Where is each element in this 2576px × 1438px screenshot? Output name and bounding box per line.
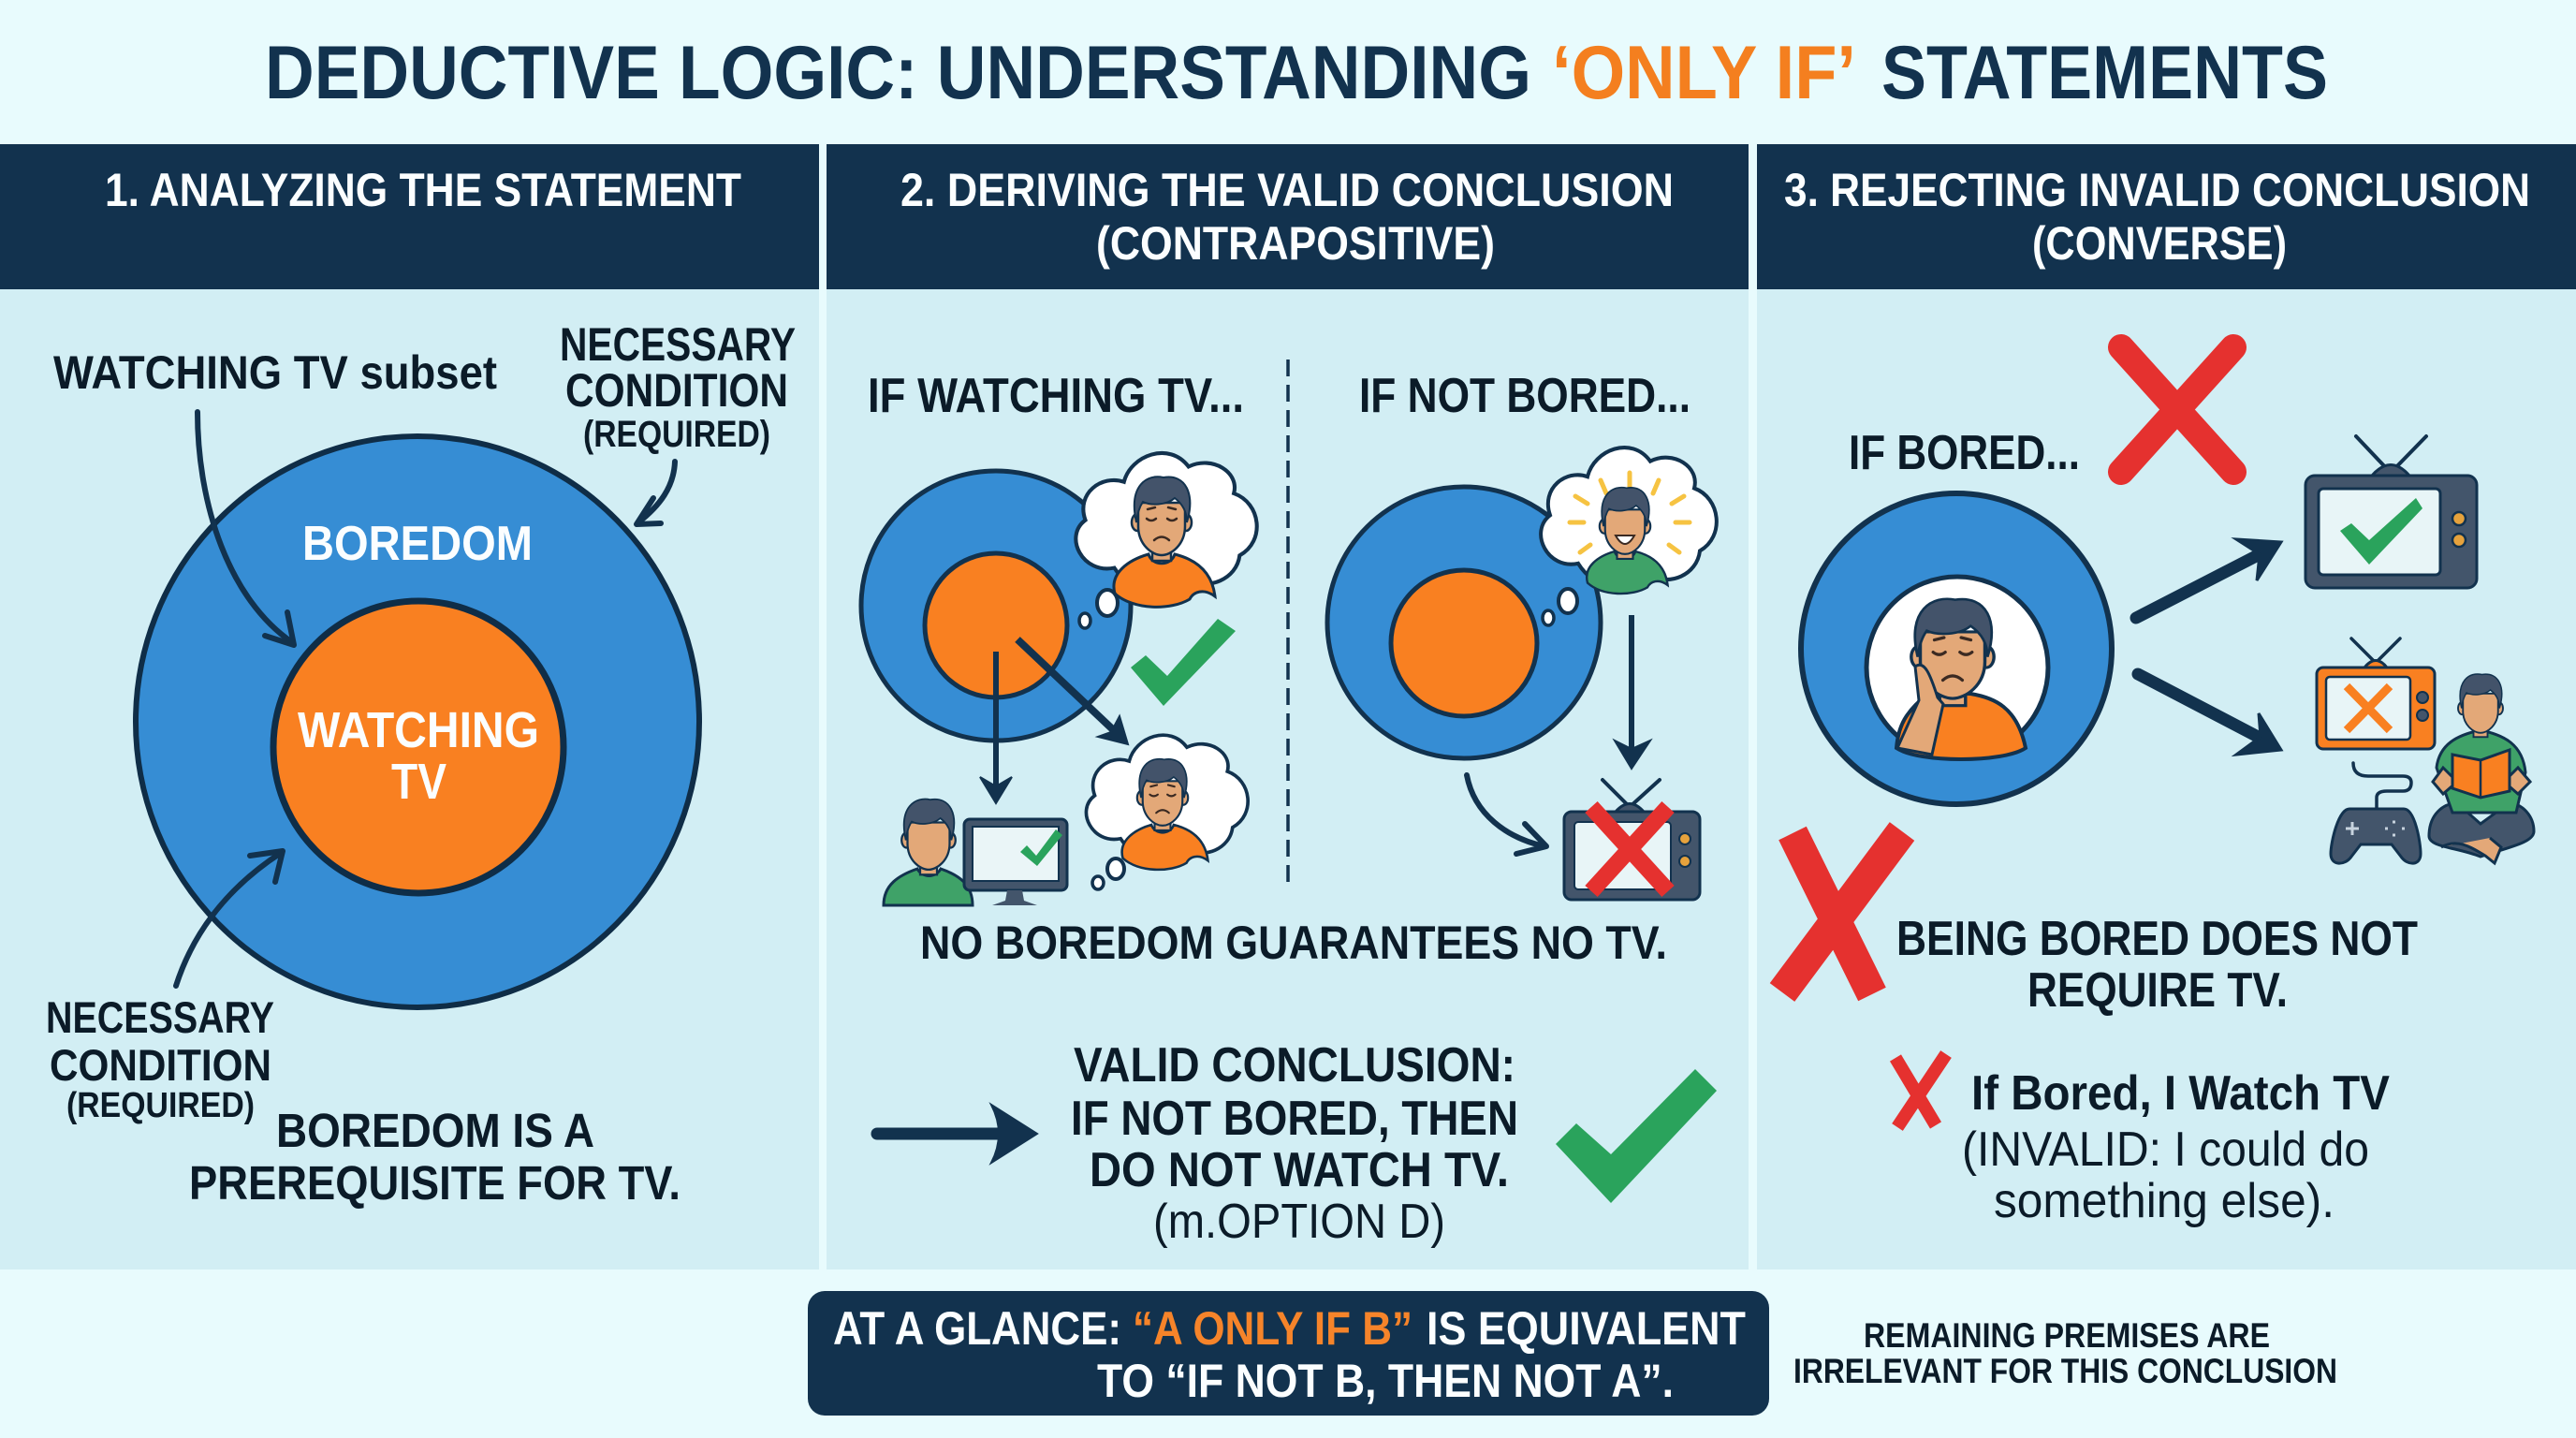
panel 2 header	[827, 144, 1749, 289]
label: necessary condition top: (REQUIRED)	[583, 414, 770, 455]
panel: analyzing the statement	[0, 144, 819, 1269]
icon: tv with check	[2305, 436, 2477, 588]
arrow: subset to inner circle	[198, 412, 294, 645]
arrow: down to crossed tv	[1615, 615, 1650, 769]
label: necessary condition top: CONDITION	[565, 364, 788, 417]
label: watching tv subset: WATCHING TV subset	[53, 346, 497, 399]
text: if bored i watch tv: something else).	[1994, 1174, 2334, 1228]
icon: orange tv with x	[2317, 638, 2435, 749]
label: necessary condition top: NECESSARY	[560, 318, 796, 371]
note: remaining premises	[1793, 1316, 2337, 1390]
arrow: to valid conclusion	[877, 1105, 1037, 1163]
panel 1 header	[0, 144, 819, 289]
icon: game controller	[2331, 763, 2421, 863]
callout: at a glance: TO “IF NOT B, THEN NOT A”.	[1097, 1355, 1674, 1407]
text: if bored i watch tv: If Bored, I Watch TV	[1971, 1066, 2390, 1121]
arrow: down to person	[980, 652, 1012, 803]
panel 2 header: (CONTRAPOSITIVE)	[1096, 217, 1495, 270]
label: necessary condition lower: NECESSARY	[46, 992, 274, 1042]
text: valid conclusion: IF NOT BORED, THEN	[1071, 1092, 1518, 1146]
icon: small red x	[1895, 1054, 1946, 1127]
icon: large green check	[1556, 1069, 1717, 1203]
venn: watching tv circle	[273, 601, 564, 893]
note: remaining premises: REMAINING PREMISES ARE	[1864, 1316, 2270, 1355]
text: prerequisite	[189, 1104, 681, 1210]
arrow: to tv check	[2136, 539, 2281, 618]
callout: at a glance: AT A GLANCE:	[833, 1302, 1121, 1355]
text: valid conclusion: DO NOT WATCH TV.	[1090, 1143, 1509, 1197]
label: if watching tv: IF WATCHING TV...	[868, 369, 1244, 423]
panel: deriving the valid conclusion	[827, 144, 1749, 1269]
label: watching tv	[298, 702, 539, 810]
text: if bored i watch tv: (INVALID: I could do	[1962, 1123, 2369, 1177]
circle: bored person	[1801, 493, 2112, 804]
label: necessary condition top	[560, 318, 796, 455]
icon: green check	[1131, 619, 1236, 706]
callout: at a glance	[808, 1291, 1769, 1416]
icon: person reading	[2429, 674, 2534, 863]
title	[265, 31, 2328, 115]
label: boredom: BOREDOM	[302, 517, 533, 571]
label: necessary condition lower: (REQUIRED)	[66, 1086, 255, 1125]
arrow: to alternatives	[2138, 674, 2281, 755]
title: STATEMENTS	[1881, 31, 2328, 115]
label: if not bored: IF NOT BORED...	[1359, 369, 1690, 423]
thought cloud: second bored person	[1086, 735, 1248, 889]
arrow: necessary lower to circle	[176, 851, 283, 986]
label: watching tv: WATCHING	[298, 702, 539, 758]
text: being bored does not require tv: REQUIRE TV.	[2027, 963, 2288, 1018]
text: being bored does not require tv	[1896, 912, 2418, 1018]
icon: crossed tv	[1564, 780, 1700, 900]
label: necessary condition lower: CONDITION	[50, 1040, 271, 1090]
text: no boredom guarantees no tv: NO BOREDOM GUARANTEES NO TV.	[920, 917, 1667, 969]
text: if bored i watch tv	[1962, 1066, 2390, 1228]
arrow: diagonal to cloud	[1017, 639, 1128, 744]
text: valid conclusion: VALID CONCLUSION:	[1074, 1038, 1515, 1093]
label: if bored: IF BORED...	[1849, 426, 2080, 480]
label: necessary condition lower	[46, 992, 274, 1125]
arrow: curved to crossed tv	[1467, 775, 1546, 854]
panel 3 header	[1757, 144, 2576, 289]
text: valid conclusion: (m.OPTION D)	[1153, 1195, 1445, 1249]
panel 3 background	[1757, 289, 2576, 1269]
title: ‘ONLY IF’	[1552, 31, 1856, 115]
title: DEDUCTIVE LOGIC: UNDERSTANDING	[265, 31, 1531, 115]
icon: brush red x	[1782, 831, 1902, 994]
arrow: necessary to outer circle	[637, 462, 675, 524]
panel 1 background	[0, 289, 819, 1269]
text: prerequisite: BOREDOM IS A	[276, 1104, 594, 1157]
icon: large red x	[2121, 347, 2233, 472]
note: remaining premises: IRRELEVANT FOR THIS CONCLUSION	[1793, 1352, 2337, 1390]
panel 2 header: 2. DERIVING THE VALID CONCLUSION	[900, 164, 1674, 216]
thought cloud: happy person	[1541, 448, 1717, 625]
thought cloud: bored person	[1076, 453, 1257, 628]
callout: at a glance: “A ONLY IF B”	[1133, 1302, 1412, 1355]
text: valid conclusion	[1071, 1038, 1518, 1249]
panel 3 header: (CONVERSE)	[2032, 217, 2287, 270]
panel 1 header: 1. ANALYZING THE STATEMENT	[105, 164, 741, 216]
divider	[1286, 360, 1290, 888]
venn: right diagram	[1327, 487, 1601, 758]
text: being bored does not require tv: BEING BORED DOES NOT	[1896, 912, 2418, 966]
venn: boredom circle	[136, 436, 699, 1007]
panel: rejecting invalid conclusion	[1757, 144, 2576, 1269]
venn: left diagram	[861, 471, 1131, 741]
label: watching tv: TV	[391, 754, 446, 810]
text: prerequisite: PREREQUISITE FOR TV.	[189, 1156, 681, 1210]
panel 2 background	[827, 289, 1749, 1269]
callout: at a glance: IS EQUIVALENT	[1427, 1302, 1746, 1355]
icon: person at monitor	[884, 800, 1067, 905]
